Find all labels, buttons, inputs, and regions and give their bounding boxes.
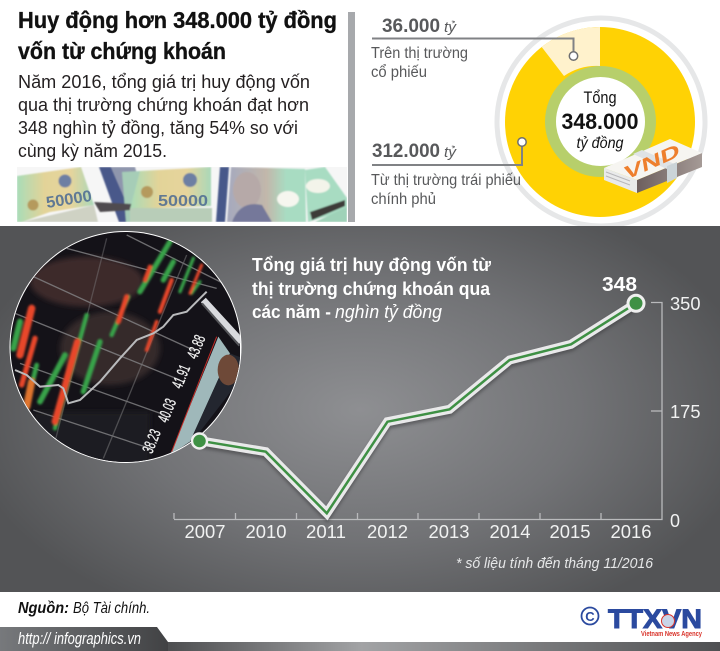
footer tab with website: http:// infographics.vn bbox=[18, 630, 141, 648]
source line: Bộ Tài chính. bbox=[73, 600, 150, 617]
start point marker bbox=[192, 434, 207, 448]
footer bar bbox=[0, 642, 720, 651]
logo: TTXVN agency bbox=[582, 604, 702, 638]
money banknotes photo strip: 50000 bbox=[45, 188, 93, 212]
callout: 312.000 bond market: Từ thị trường trái phiếu bbox=[371, 172, 521, 189]
chart title: thị trường chứng khoán qua bbox=[252, 279, 491, 299]
title bbox=[18, 7, 337, 64]
x axis labels: 2010 bbox=[246, 522, 286, 542]
vertical divider bar bbox=[348, 12, 355, 222]
callout: 36.000 stock market: cổ phiếu bbox=[371, 64, 427, 81]
photo: stock market screen in circle bbox=[0, 225, 243, 465]
callout: 36.000 stock market bbox=[371, 16, 578, 81]
photo: stock market screen in circle: 38.23 bbox=[140, 427, 165, 456]
y axis labels: 175 bbox=[670, 402, 700, 422]
intro text block: qua thị trường chứng khoán đạt hơn bbox=[18, 94, 309, 115]
logo: TTXVN agency: C bbox=[585, 609, 595, 624]
agency tagline: Vietnam News Agency bbox=[641, 631, 702, 638]
x axis labels: 2013 bbox=[428, 522, 470, 542]
icon: VND banknote stack bbox=[604, 139, 702, 193]
x axis labels: 2016 bbox=[610, 522, 652, 542]
chart axes bbox=[174, 302, 662, 520]
money banknotes photo strip bbox=[17, 167, 347, 222]
globe bbox=[662, 614, 674, 628]
copyright symbol bbox=[582, 608, 598, 624]
end value label: 348 bbox=[602, 273, 637, 296]
TTXVN wordmark: TTXVN bbox=[608, 604, 702, 634]
data line bbox=[200, 306, 636, 516]
footer tab with website bbox=[0, 627, 168, 651]
end point marker bbox=[628, 295, 644, 311]
photo: stock market screen in circle: 41.91 bbox=[169, 362, 194, 391]
donut centre label bbox=[562, 88, 638, 152]
donut chart: funding structure bbox=[497, 18, 705, 226]
x axis labels: 2014 bbox=[490, 522, 530, 542]
footnote: * số liệu tính đến tháng 11/2016 bbox=[456, 556, 654, 572]
x axis labels: 2015 bbox=[550, 522, 590, 542]
callout: 312.000 bond market: chính phủ bbox=[371, 191, 436, 208]
y axis labels: 0 bbox=[670, 511, 680, 531]
title: vốn từ chứng khoán bbox=[18, 38, 226, 64]
source line: Nguồn: bbox=[18, 600, 69, 617]
x axis labels: 2012 bbox=[367, 522, 408, 542]
source line bbox=[18, 600, 150, 617]
callout: 312.000 bond market: tỷ bbox=[444, 144, 458, 161]
x axis labels: 2007 bbox=[184, 522, 226, 542]
segment: stock market 36.000 bbox=[542, 27, 600, 76]
chart title: nghìn tỷ đồng bbox=[335, 302, 442, 322]
x axis labels: 2011 bbox=[306, 522, 346, 542]
intro text block: Năm 2016, tổng giá trị huy động vốn bbox=[18, 71, 310, 92]
icon: VND banknote stack: VND bbox=[623, 139, 681, 184]
chart title: các năm - bbox=[252, 302, 331, 322]
callout: 312.000 bond market: 312.000 bbox=[372, 141, 440, 162]
title: Huy động hơn 348.000 tỷ đồng bbox=[18, 7, 337, 33]
donut centre label: 348.000 bbox=[562, 109, 638, 134]
callout: 36.000 stock market: 36.000 bbox=[382, 16, 440, 37]
y axis labels bbox=[670, 294, 700, 531]
photo: stock market screen in circle: 43.88 bbox=[185, 333, 209, 361]
chart title: Tổng giá trị huy động vốn từ bbox=[252, 255, 492, 275]
money banknotes photo strip: 50000 bbox=[158, 193, 208, 210]
intro text block: cùng kỳ năm 2015. bbox=[18, 140, 167, 161]
x axis labels bbox=[184, 522, 652, 542]
intro text block bbox=[18, 71, 310, 161]
callout: 36.000 stock market: tỷ bbox=[444, 19, 458, 36]
line chart: total funds raised by year bbox=[174, 273, 700, 542]
outer grey ring bbox=[497, 18, 705, 226]
photo: stock market screen in circle: 40.03 bbox=[155, 396, 180, 425]
y axis labels: 350 bbox=[670, 294, 700, 314]
intro text block: 348 nghìn tỷ đồng, tăng 54% so với bbox=[18, 117, 298, 138]
chart title bbox=[252, 255, 492, 322]
donut centre label: tỷ đồng bbox=[576, 135, 624, 152]
callout: 312.000 bond market bbox=[371, 138, 526, 208]
panel: dark chart background bbox=[0, 226, 720, 592]
inner green ring bbox=[550, 72, 650, 172]
segment: bond market 312.000 bbox=[505, 27, 695, 217]
callout: 36.000 stock market: Trên thị trường bbox=[371, 45, 468, 62]
donut centre label: Tổng bbox=[584, 88, 616, 107]
